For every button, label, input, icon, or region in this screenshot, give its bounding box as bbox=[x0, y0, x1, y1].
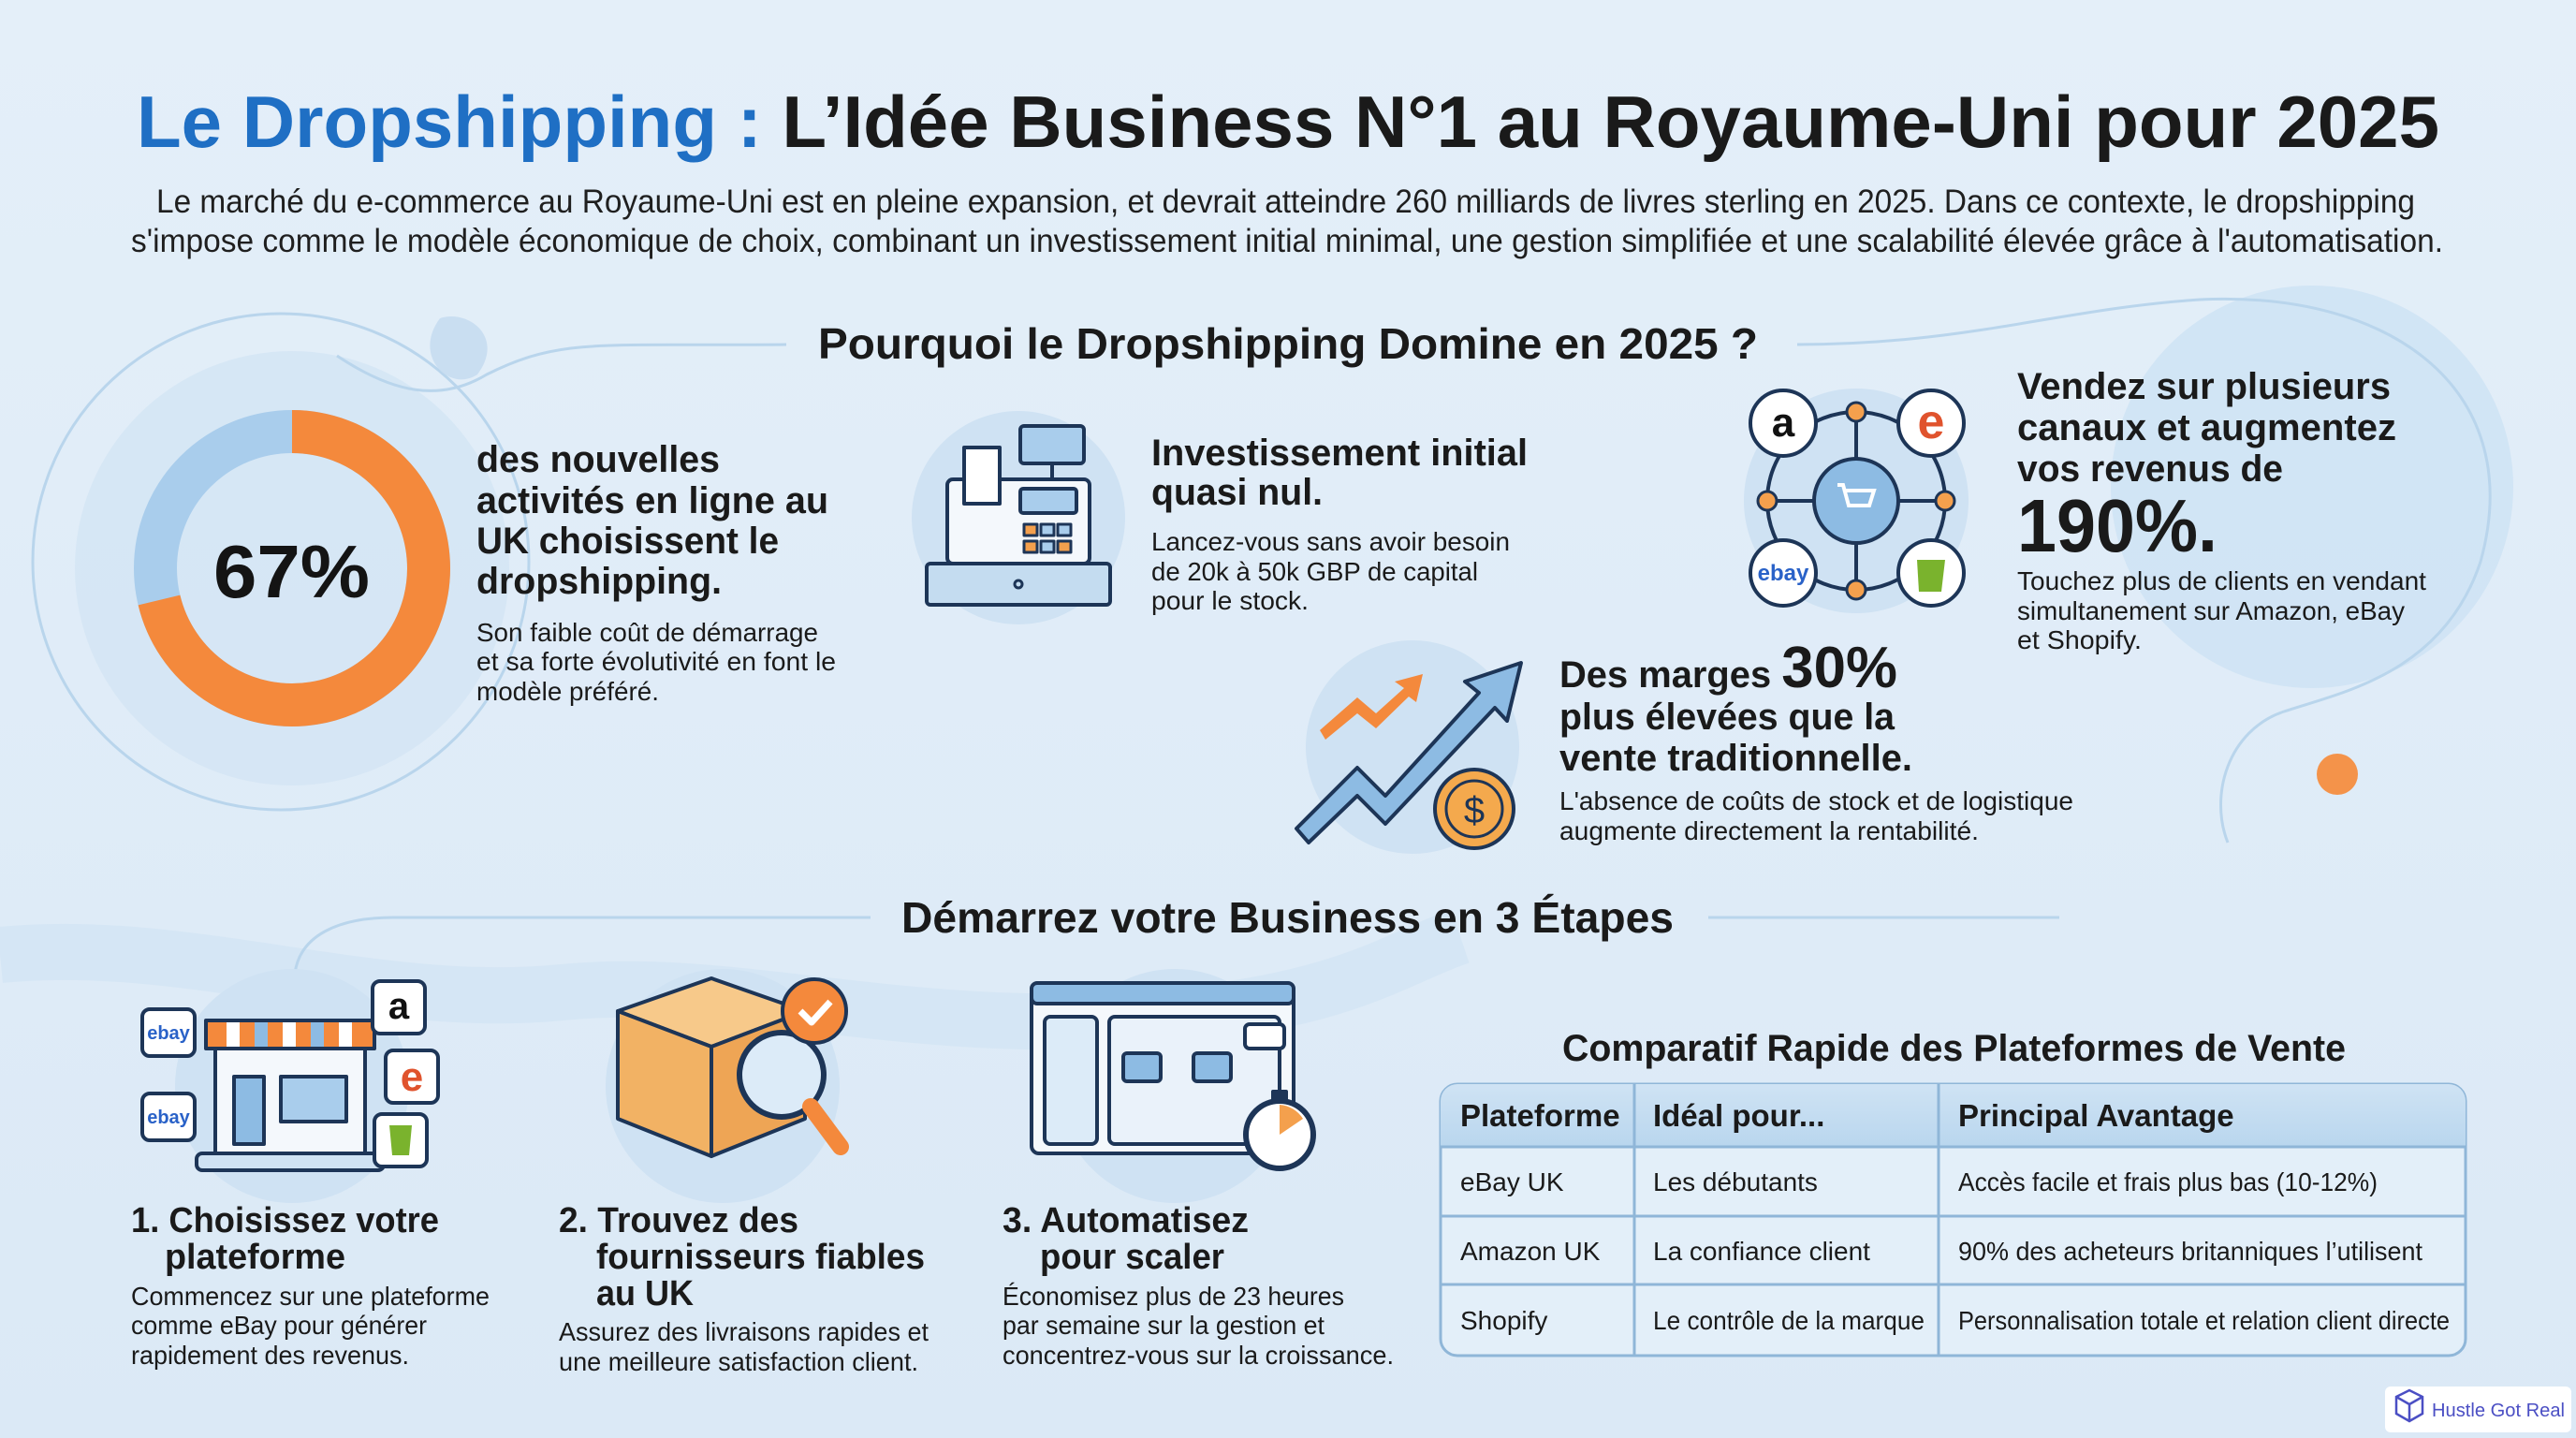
text: marges 30%: plus élevées que la bbox=[1559, 697, 1895, 738]
icon: step 1 storefront: ebay bbox=[147, 1023, 191, 1044]
donut chart 67%: 67% bbox=[213, 530, 370, 613]
text: step 3: concentrez-vous sur la croissance. bbox=[1003, 1341, 1394, 1370]
table header row: Plateforme bbox=[1460, 1098, 1620, 1133]
text: step 1: Commencez sur une plateforme bbox=[131, 1282, 490, 1311]
table header row: Principal Avantage bbox=[1958, 1098, 2234, 1133]
text: investissement bbox=[1151, 433, 1528, 615]
subtitle text: Le marché du e-commerce au Royaume-Uni est en pleine expansion, et devrait atteindre 260 milliards de livres sterling en 2025. Dans ce contexte, le dropshipping bbox=[156, 183, 2415, 220]
text: investissement: Lancez-vous sans avoir besoin bbox=[1151, 527, 1510, 556]
icon: multichannel network: a bbox=[1772, 400, 1795, 446]
table rows bbox=[1460, 1167, 2450, 1335]
text: step 2: fournisseurs fiables bbox=[596, 1238, 925, 1277]
text: step 2 bbox=[559, 1201, 929, 1376]
text: vendez 190%: Vendez sur plusieurs bbox=[2017, 366, 2391, 407]
icon: cash register bbox=[912, 411, 1125, 624]
text: vendez 190%: canaux et augmentez bbox=[2017, 407, 2396, 448]
text: step 1: rapidement des revenus. bbox=[131, 1341, 409, 1370]
text: vendez 190%: et Shopify. bbox=[2017, 625, 2142, 654]
icon: step 1 storefront: a bbox=[388, 986, 410, 1027]
table rows: eBay UK bbox=[1460, 1167, 1564, 1196]
text: step 1: comme eBay pour générer bbox=[131, 1311, 427, 1340]
text: 67% description: UK choisissent le bbox=[476, 521, 779, 562]
icon: multichannel network: e bbox=[1918, 395, 1944, 449]
text: step 2: 2. Trouvez des bbox=[559, 1201, 798, 1240]
text: 67% description: modèle préféré. bbox=[476, 677, 659, 706]
icon: multichannel network: ebay bbox=[1758, 561, 1809, 586]
text: investissement: Investissement initial bbox=[1151, 433, 1528, 474]
text: step 1: 1. Choisissez votre bbox=[131, 1201, 439, 1240]
table rows: Le contrôle de la marque bbox=[1653, 1306, 1925, 1335]
text: vendez 190%: 190%. bbox=[2017, 484, 2217, 567]
table rows: Personnalisation totale et relation client directe bbox=[1958, 1306, 2450, 1335]
section heading: pourquoi: Pourquoi le Dropshipping Domine en 2025 ? bbox=[818, 319, 1758, 368]
icon: step 1 storefront: ebay bbox=[147, 1108, 191, 1128]
table rows: Accès facile et frais plus bas (10-12%) bbox=[1958, 1167, 2378, 1196]
text: 67% description: et sa forte évolutivité en font le bbox=[476, 647, 836, 676]
text: marges 30%: augmente directement la rentabilité. bbox=[1559, 816, 1979, 845]
text: marges 30%: Des marges 30% bbox=[1559, 636, 1897, 700]
text: step 3: par semaine sur la gestion et bbox=[1003, 1311, 1325, 1340]
text: step 3 bbox=[1003, 1201, 1394, 1370]
watermark badge bbox=[2385, 1387, 2571, 1432]
comparison table bbox=[1441, 1084, 2466, 1356]
icon: step 3 automation dashboard with stopwatch bbox=[1032, 969, 1313, 1203]
table header row bbox=[1460, 1098, 2234, 1133]
text: step 3: Économisez plus de 23 heures bbox=[1003, 1282, 1344, 1311]
text: vendez 190% bbox=[2017, 366, 2426, 654]
text: 67% description: activités en ligne au bbox=[476, 480, 828, 521]
icon: growth arrow with coin bbox=[1296, 640, 1521, 854]
text: 67% description: des nouvelles bbox=[476, 439, 720, 480]
text: step 2: une meilleure satisfaction client. bbox=[559, 1347, 918, 1376]
icon: step 1 storefront bbox=[142, 969, 438, 1203]
text: step 2: Assurez des livraisons rapides et bbox=[559, 1317, 929, 1346]
section heading: 3 étapes: Démarrez votre Business en 3 Étapes bbox=[901, 893, 1674, 942]
text: step 3: 3. Automatisez bbox=[1003, 1201, 1249, 1240]
section heading: 3 étapes bbox=[295, 893, 2059, 974]
table rows: La confiance client bbox=[1653, 1237, 1870, 1266]
table heading: Comparatif Rapide des Plateformes de Vente bbox=[1562, 1028, 2346, 1069]
table rows: 90% des acheteurs britanniques l’utilisent bbox=[1958, 1237, 2422, 1266]
text: step 3: pour scaler bbox=[1040, 1238, 1224, 1277]
icon: step 1 storefront: e bbox=[401, 1054, 423, 1100]
text: 67% description bbox=[476, 439, 836, 706]
text: investissement: pour le stock. bbox=[1151, 586, 1309, 615]
title: Le Dropshipping : L’Idée Business N°1 au Royaume-Uni pour 2025 bbox=[137, 81, 2439, 163]
table rows: Amazon UK bbox=[1460, 1237, 1601, 1266]
text: vendez 190%: simultanement sur Amazon, eBay bbox=[2017, 596, 2405, 625]
text: investissement: quasi nul. bbox=[1151, 472, 1323, 513]
text: vendez 190%: Touchez plus de clients en vendant bbox=[2017, 566, 2426, 595]
text: 67% description: Son faible coût de démarrage bbox=[476, 618, 818, 647]
decorative background blobs bbox=[0, 286, 2513, 1021]
table rows: Shopify bbox=[1460, 1306, 1547, 1335]
text: vendez 190%: vos revenus de bbox=[2017, 448, 2283, 490]
subtitle text bbox=[131, 183, 2443, 259]
table rows: Les débutants bbox=[1653, 1167, 1818, 1196]
text: marges 30%: L'absence de coûts de stock et de logistique bbox=[1559, 786, 2073, 815]
text: 67% description: dropshipping. bbox=[476, 561, 722, 602]
text: investissement: de 20k à 50k GBP de capital bbox=[1151, 557, 1478, 586]
subtitle text: s'impose comme le modèle économique de choix, combinant un investissement initial minimal, une gestion simplifiée et une scalabilité élevée grâce à l'automatisation. bbox=[131, 223, 2443, 259]
text: step 1 bbox=[131, 1201, 490, 1370]
table header row: Idéal pour... bbox=[1653, 1098, 1824, 1133]
text: marges 30%: vente traditionnelle. bbox=[1559, 738, 1912, 779]
text: step 1: plateforme bbox=[165, 1238, 345, 1277]
icon: growth arrow with coin: $ bbox=[1464, 790, 1485, 831]
text: marges 30% bbox=[1559, 636, 2073, 845]
donut chart 67% bbox=[155, 432, 429, 705]
icon: step 2 box with magnifier bbox=[606, 969, 846, 1203]
text: step 2: au UK bbox=[596, 1274, 695, 1313]
icon: multichannel network bbox=[1744, 389, 1969, 613]
watermark badge: Hustle Got Real bbox=[2432, 1401, 2565, 1421]
